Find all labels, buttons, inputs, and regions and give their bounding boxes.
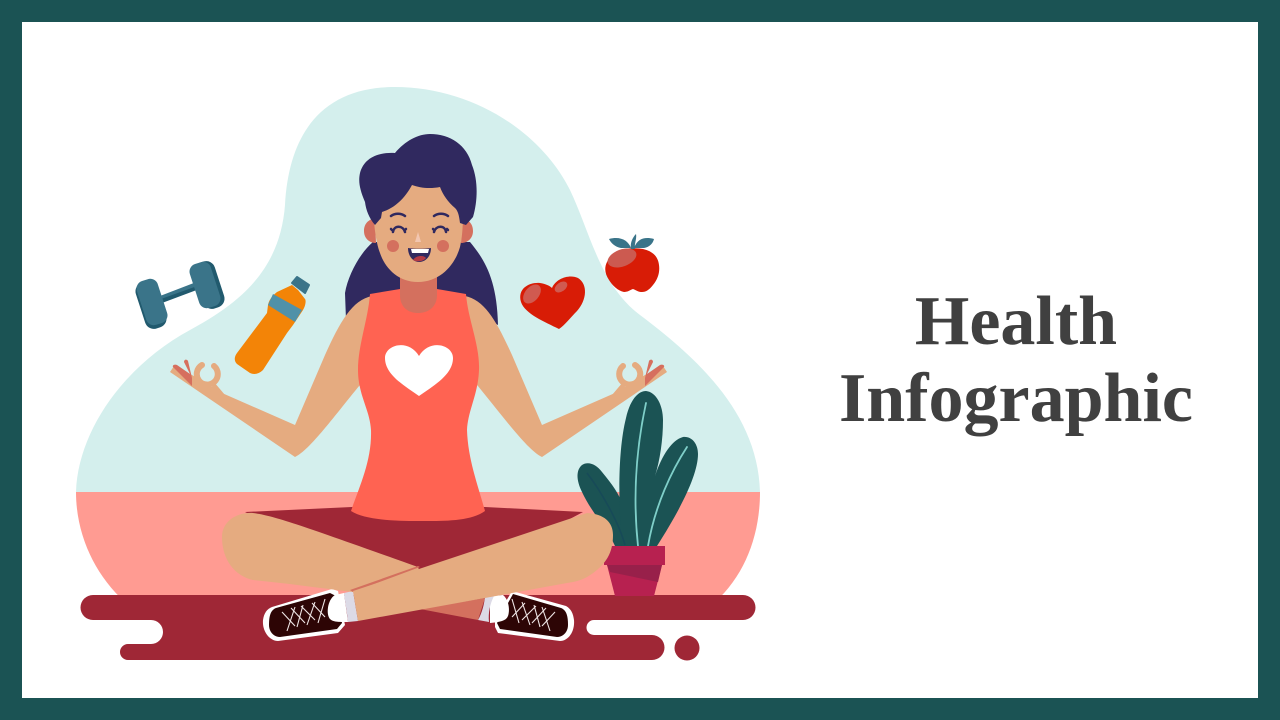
top <box>351 289 485 521</box>
icon: apple <box>605 234 659 292</box>
right shoes and socks <box>478 591 574 641</box>
icon: heart <box>520 276 585 329</box>
woman <box>170 134 667 641</box>
heart on top <box>385 345 453 396</box>
face <box>373 175 463 282</box>
front leg <box>353 513 613 621</box>
back leg <box>222 513 430 600</box>
ground shape <box>80 595 756 660</box>
cheeks and nose <box>387 232 449 252</box>
plant leaves <box>578 463 632 546</box>
right sock <box>490 595 509 623</box>
left sock <box>328 593 348 622</box>
neck <box>400 270 437 313</box>
mouth <box>408 248 431 262</box>
leg shadow <box>350 566 485 620</box>
plant pot <box>607 565 662 596</box>
left shoes and socks <box>263 589 358 641</box>
title: Health <box>915 283 1117 360</box>
shorts <box>245 507 583 600</box>
ears <box>364 218 473 243</box>
title: Infographic <box>839 360 1193 437</box>
eyes and brows <box>391 214 448 232</box>
icon: dumbbell <box>133 259 227 331</box>
icon: water bottle <box>235 277 309 374</box>
background blob: floor <box>76 492 760 602</box>
right shoe <box>495 591 574 641</box>
back hair <box>345 242 498 325</box>
left arm and hand <box>170 296 372 457</box>
front hair <box>359 134 477 225</box>
right arm and hand <box>465 296 667 457</box>
plant <box>578 391 698 596</box>
left shoe <box>263 589 345 641</box>
background blob: sky <box>76 87 760 492</box>
